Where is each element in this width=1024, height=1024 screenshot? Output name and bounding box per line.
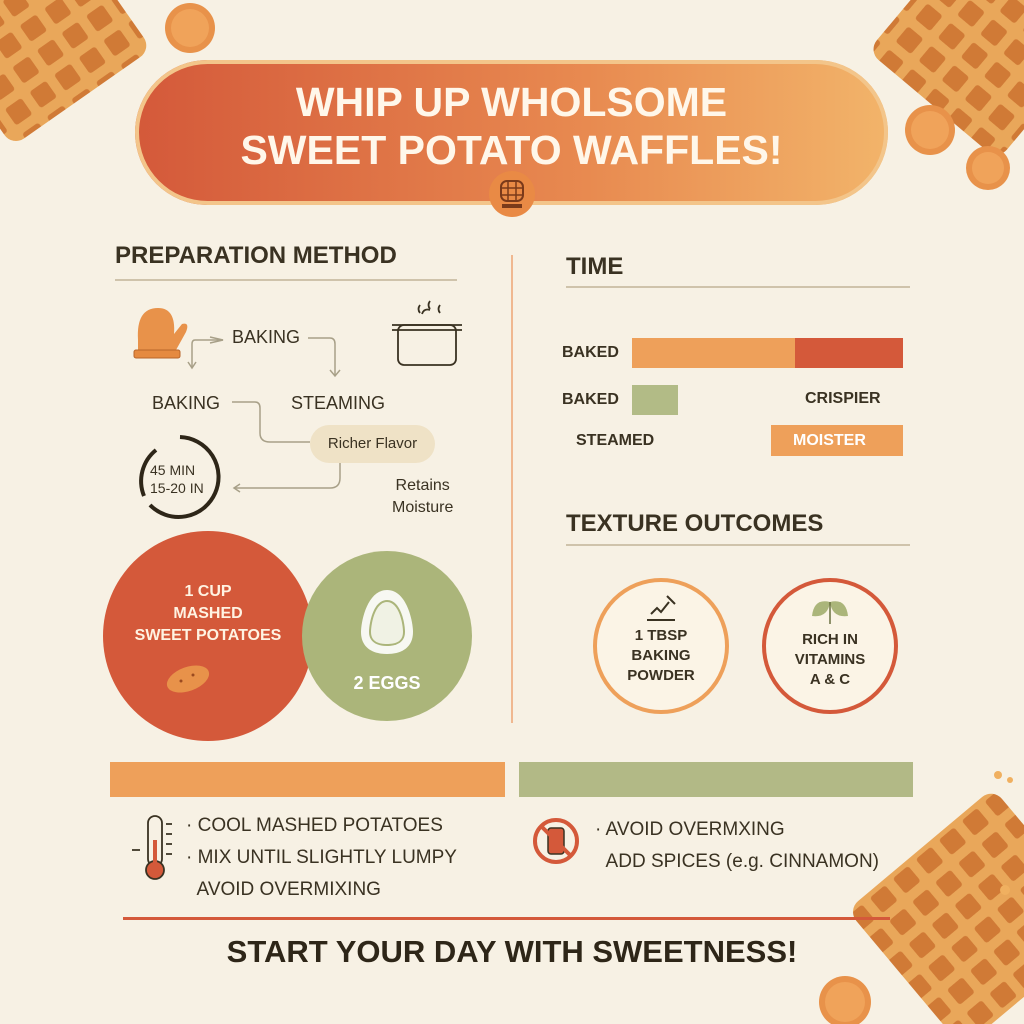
badge: vitamins: RICH IN xyxy=(802,631,858,648)
panel: tips left: AVOID OVERMIXING xyxy=(197,879,381,900)
bar chart: time: STEAMED xyxy=(576,432,654,449)
heading: texture outcomes: TEXTURE OUTCOMES xyxy=(566,510,823,537)
badge: baking powder: BAKING xyxy=(631,647,691,664)
icon: pot xyxy=(392,301,462,365)
panel: tips right: · AVOID OVERMXING xyxy=(595,819,785,840)
badge: vitamins: A & C xyxy=(810,671,850,688)
bar chart: time xyxy=(562,338,903,456)
bar chart: time: CRISPIER xyxy=(805,390,881,407)
flow diagram: Richer Flavor xyxy=(328,435,417,452)
heading: time: TIME xyxy=(566,253,623,280)
icon: timer ring xyxy=(150,437,219,517)
title xyxy=(240,79,783,173)
panel: tips right: ADD SPICES (e.g. CINNAMON) xyxy=(606,851,879,872)
ingredient: eggs: 2 EGGS xyxy=(353,673,421,693)
badge: vitamins xyxy=(762,578,898,714)
title: WHIP UP WHOLSOME xyxy=(296,79,727,125)
badge: vitamins: VITAMINS xyxy=(795,651,865,668)
panel: tips right xyxy=(519,762,913,872)
panel: tips left: · MIX UNTIL SLIGHTLY LUMPY xyxy=(186,847,457,868)
flow diagram: Retains xyxy=(396,477,450,494)
ingredient: eggs xyxy=(302,551,472,721)
ingredient: sweet potatoes xyxy=(103,531,313,741)
icon: oven mitt xyxy=(134,308,187,358)
badge: baking powder: POWDER xyxy=(627,667,695,684)
flow diagram: STEAMING xyxy=(291,393,385,413)
badge: baking powder: 1 TBSP xyxy=(635,627,687,644)
ingredient: sweet potatoes: SWEET POTATOES xyxy=(135,627,281,644)
footer tagline: START YOUR DAY WITH SWEETNESS! xyxy=(227,934,797,969)
flow diagram: BAKING xyxy=(152,393,220,413)
badge: baking powder xyxy=(593,578,729,714)
panel: tips left: · COOL MASHED POTATOES xyxy=(186,815,443,836)
flow diagram xyxy=(134,300,462,519)
bar chart: time: BAKED xyxy=(562,391,619,408)
ingredient: sweet potatoes: MASHED xyxy=(173,605,243,622)
ingredient: sweet potatoes: 1 CUP xyxy=(184,583,232,600)
panel: tips left xyxy=(110,762,505,900)
title: SWEET POTATO WAFFLES! xyxy=(240,127,783,173)
flow diagram: Moisture xyxy=(392,499,453,516)
icon: waffle maker xyxy=(489,171,535,217)
heading: preparation method: PREPARATION METHOD xyxy=(115,242,397,269)
bar chart: time: BAKED xyxy=(562,344,619,361)
title banner xyxy=(135,60,888,205)
flow diagram: 15-20 IN xyxy=(150,480,204,496)
flow diagram: BAKING xyxy=(232,327,300,347)
bar chart: time: MOISTER xyxy=(793,432,866,449)
flow diagram: 45 MIN xyxy=(150,462,195,478)
